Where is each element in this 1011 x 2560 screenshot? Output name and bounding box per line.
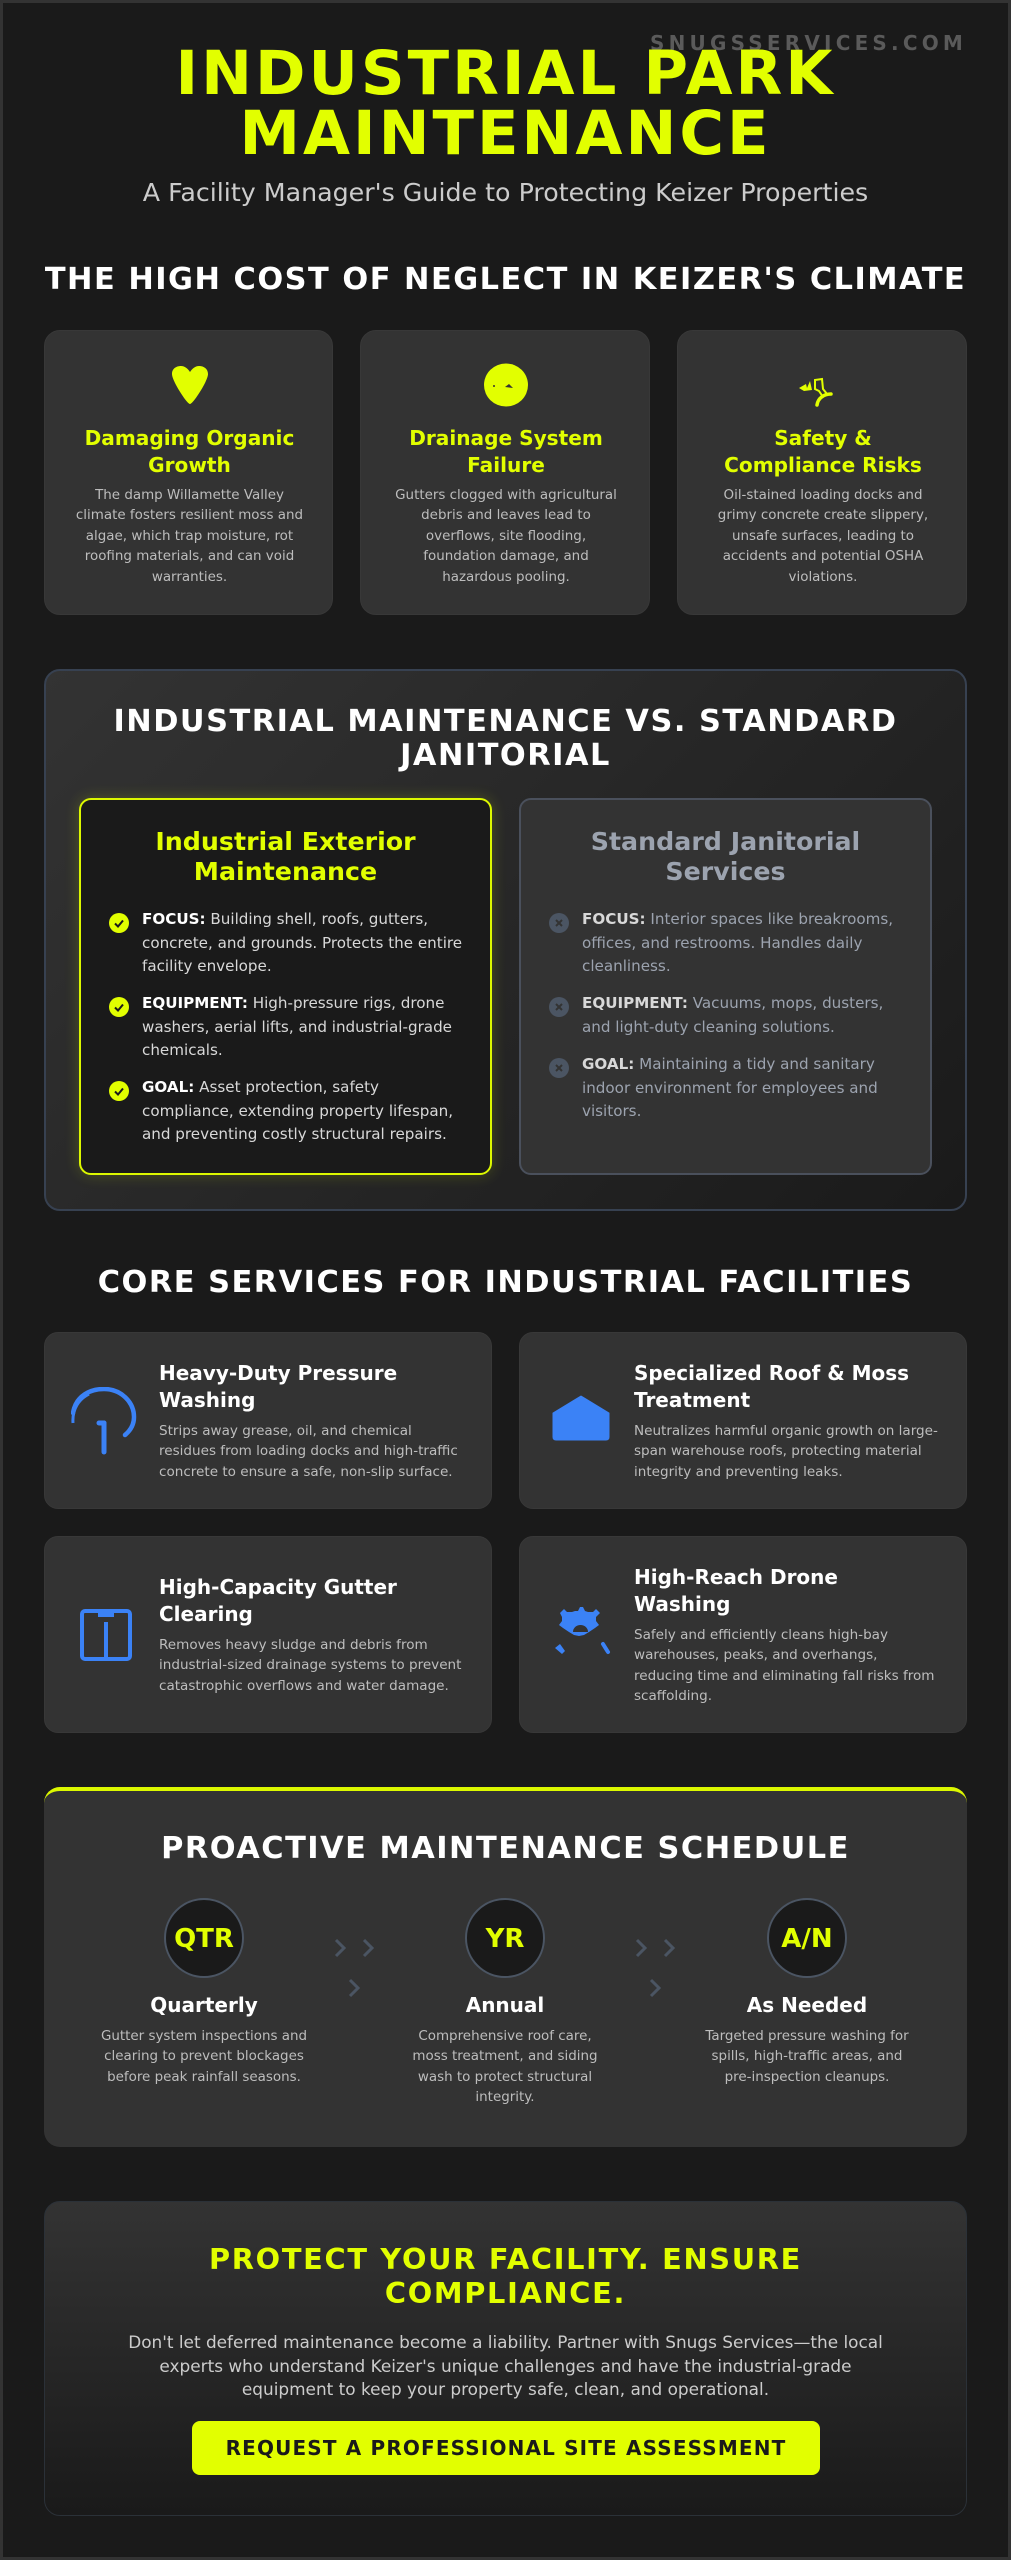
service text: catastrophic overflows and water damage. bbox=[159, 1678, 449, 1694]
icon: pressure arc bbox=[71, 1387, 136, 1454]
service title: Treatment bbox=[634, 1388, 750, 1412]
step text: Gutter system inspections and bbox=[101, 2029, 307, 2044]
panel: call to action bbox=[44, 2201, 967, 2516]
focus item bbox=[582, 910, 893, 975]
service title: High-Reach Drone bbox=[634, 1565, 838, 1589]
goal item: indoor environment for employees and bbox=[582, 1078, 878, 1096]
title: MAINTENANCE bbox=[239, 99, 772, 169]
goal item: visitors. bbox=[582, 1102, 641, 1120]
service text bbox=[159, 1423, 458, 1480]
card text: algae, which trap moisture, rot bbox=[86, 529, 293, 544]
service text: Removes heavy sludge and debris from bbox=[159, 1637, 428, 1653]
panel: damaging organic growth bbox=[44, 330, 333, 615]
card title: Growth bbox=[148, 453, 231, 477]
step text: Comprehensive roof care, bbox=[418, 2029, 592, 2044]
icon: check bbox=[109, 1081, 129, 1101]
equipment item bbox=[142, 994, 452, 1059]
step text: spills, high-traffic areas, and bbox=[712, 2049, 902, 2064]
card title bbox=[724, 426, 922, 477]
service text: warehouses, peaks, and overhangs, bbox=[634, 1647, 877, 1663]
step badge: quarterly: QTR bbox=[174, 1924, 234, 1954]
card text: The damp Willamette Valley bbox=[95, 488, 284, 503]
service title: Specialized Roof & Moss bbox=[634, 1361, 909, 1385]
equipment item bbox=[582, 994, 883, 1036]
step badge: as needed: A/N bbox=[781, 1924, 833, 1954]
focus item: concrete, and grounds. Protects the entire bbox=[142, 934, 462, 952]
step text: before peak rainfall seasons. bbox=[107, 2070, 301, 2085]
service text bbox=[634, 1627, 935, 1704]
service title bbox=[159, 1575, 397, 1626]
service text: scaffolding. bbox=[634, 1688, 712, 1704]
card text bbox=[395, 488, 617, 585]
service title: Heavy-Duty Pressure bbox=[159, 1361, 397, 1385]
icon: heart leaf bbox=[172, 366, 208, 404]
card text: accidents and potential OSHA bbox=[723, 549, 923, 564]
heading: schedule: PROACTIVE MAINTENANCE SCHEDULE bbox=[161, 1831, 850, 1866]
cta heading: COMPLIANCE. bbox=[385, 2276, 626, 2310]
cta text: experts who understand Keizer's unique challenges and have the industrial-grade bbox=[159, 2356, 852, 2376]
icon: check bbox=[109, 913, 129, 933]
icon: gutter bbox=[80, 1609, 132, 1661]
service title: High-Capacity Gutter bbox=[159, 1575, 397, 1599]
service title: Washing bbox=[159, 1388, 255, 1412]
goal item: GOAL: Maintaining a tidy and sanitary bbox=[582, 1055, 875, 1073]
panel: drone washing bbox=[519, 1536, 967, 1733]
step title: Quarterly bbox=[150, 1993, 258, 2017]
step text: Targeted pressure washing for bbox=[705, 2029, 909, 2044]
card title bbox=[85, 426, 294, 477]
service text: industrial-sized drainage systems to prevent bbox=[159, 1657, 461, 1673]
card title: Safety & bbox=[774, 426, 872, 450]
step badge: quarterly bbox=[164, 1898, 244, 1978]
focus item: facility envelope. bbox=[142, 957, 272, 975]
card text: warranties. bbox=[152, 570, 227, 585]
panel: proactive maintenance schedule bbox=[44, 1787, 967, 2147]
card text: foundation damage, and bbox=[423, 549, 589, 564]
step text: clearing to prevent blockages bbox=[104, 2049, 304, 2064]
goal item bbox=[582, 1055, 878, 1120]
service title: Washing bbox=[634, 1592, 730, 1616]
icon: clogged drain bbox=[484, 364, 528, 406]
card title: Failure bbox=[467, 453, 545, 477]
service title bbox=[634, 1361, 909, 1412]
service text: concrete to ensure a safe, non-slip surface. bbox=[159, 1464, 453, 1480]
card text: grimy concrete create slippery, bbox=[718, 508, 928, 523]
subtitle: A Facility Manager's Guide to Protecting Keizer Properties bbox=[143, 178, 868, 207]
card text: Oil-stained loading docks and bbox=[724, 488, 922, 503]
service text: Neutralizes harmful organic growth on large- bbox=[634, 1423, 938, 1439]
panel title: Maintenance bbox=[194, 857, 377, 886]
icon: slip hazard bbox=[799, 378, 833, 407]
panel title bbox=[155, 827, 416, 886]
focus item: offices, and restrooms. Handles daily bbox=[582, 934, 862, 952]
heading: comparison: JANITORIAL bbox=[400, 738, 611, 773]
step title: Annual bbox=[466, 1993, 544, 2017]
service text: integrity and preventing leaks. bbox=[634, 1464, 843, 1480]
goal item: and preventing costly structural repairs. bbox=[142, 1125, 447, 1143]
service text bbox=[634, 1423, 938, 1480]
watermark: website: SNUGSSERVICES.COM bbox=[650, 31, 967, 55]
goal item: compliance, extending property lifespan, bbox=[142, 1102, 453, 1120]
card text bbox=[76, 488, 303, 585]
service text: reducing time and eliminating fall risks from bbox=[634, 1668, 935, 1684]
equipment item: washers, aerial lifts, and industrial-grade bbox=[142, 1018, 452, 1036]
step text: integrity. bbox=[475, 2090, 535, 2105]
icon: roof bbox=[552, 1396, 610, 1440]
icon: drone bbox=[555, 1607, 610, 1654]
card title: Compliance Risks bbox=[724, 453, 922, 477]
icon: check bbox=[109, 997, 129, 1017]
service text: span warehouse roofs, protecting material bbox=[634, 1443, 922, 1459]
panel title: Services bbox=[665, 857, 786, 886]
heading: core services: CORE SERVICES FOR INDUSTRIAL FACILITIES bbox=[98, 1265, 913, 1300]
cta button bbox=[192, 2421, 820, 2475]
cta text bbox=[45, 2331, 966, 2402]
focus item bbox=[142, 910, 462, 975]
step text bbox=[412, 2029, 598, 2105]
panel title: Standard Janitorial bbox=[591, 827, 860, 856]
panel: gutter clearing bbox=[44, 1536, 492, 1733]
goal item bbox=[142, 1078, 453, 1143]
panel title: Industrial Exterior bbox=[155, 827, 416, 856]
card text: hazardous pooling. bbox=[442, 570, 570, 585]
service title bbox=[634, 1565, 838, 1616]
card text: climate fosters resilient moss and bbox=[76, 508, 303, 523]
arrow: quarterly to annual bbox=[335, 1939, 374, 1997]
card title bbox=[409, 426, 603, 477]
focus item: cleanliness. bbox=[582, 957, 671, 975]
card text: overflows, site flooding, bbox=[426, 529, 586, 544]
card text: unsafe surfaces, leading to bbox=[732, 529, 914, 544]
title: INDUSTRIAL PARK bbox=[176, 39, 835, 109]
heading: comparison: INDUSTRIAL MAINTENANCE VS. STANDARD bbox=[113, 704, 898, 739]
card text: roofing materials, and can void bbox=[85, 549, 294, 564]
focus item: FOCUS: Building shell, roofs, gutters, bbox=[142, 910, 428, 928]
card text bbox=[718, 488, 928, 585]
title bbox=[176, 39, 835, 169]
service text bbox=[159, 1637, 462, 1694]
cta text: equipment to keep your property safe, clean, and operational. bbox=[242, 2379, 769, 2399]
step badge: annual: YR bbox=[486, 1924, 524, 1954]
card text: Gutters clogged with agricultural bbox=[395, 488, 617, 503]
step text: wash to protect structural bbox=[418, 2070, 592, 2085]
cta text: Don't let deferred maintenance become a liability. Partner with Snugs Services—the local bbox=[128, 2332, 883, 2352]
card text: debris and leaves lead to bbox=[421, 508, 591, 523]
arrow: annual to as needed bbox=[631, 1935, 681, 2001]
panel: maintenance vs janitorial comparison bbox=[44, 669, 967, 1211]
cta button: REQUEST A PROFESSIONAL SITE ASSESSMENT bbox=[226, 2436, 786, 2460]
card title: Drainage System bbox=[409, 426, 603, 450]
panel: drainage system failure bbox=[360, 330, 650, 615]
service title bbox=[159, 1361, 397, 1412]
step text bbox=[101, 2029, 307, 2085]
service text: residues from loading docks and high-traffic bbox=[159, 1443, 458, 1459]
panel: pressure washing bbox=[44, 1332, 492, 1509]
equipment item: chemicals. bbox=[142, 1041, 223, 1059]
card text: violations. bbox=[789, 570, 857, 585]
panel: standard janitorial services bbox=[519, 798, 932, 1175]
step badge: annual bbox=[465, 1898, 545, 1978]
cta heading: PROTECT YOUR FACILITY. ENSURE bbox=[209, 2242, 802, 2276]
panel: safety and compliance risks bbox=[677, 330, 967, 615]
icon: cross bbox=[549, 997, 569, 1017]
step badge: as needed bbox=[767, 1898, 847, 1978]
heading: high cost of neglect: THE HIGH COST OF NEGLECT IN KEIZER'S CLIMATE bbox=[45, 262, 966, 297]
step title: As Needed bbox=[747, 1993, 867, 2017]
card title: Damaging Organic bbox=[85, 426, 294, 450]
step text: moss treatment, and siding bbox=[412, 2049, 598, 2064]
icon: cross bbox=[549, 1058, 569, 1078]
focus item: FOCUS: Interior spaces like breakrooms, bbox=[582, 910, 893, 928]
service text: Strips away grease, oil, and chemical bbox=[159, 1423, 412, 1439]
goal item: GOAL: Asset protection, safety bbox=[142, 1078, 379, 1096]
service title: Clearing bbox=[159, 1602, 253, 1626]
cta heading bbox=[45, 2242, 966, 2310]
icon: cross bbox=[549, 913, 569, 933]
step text bbox=[647, 2027, 967, 2088]
equipment item: and light-duty cleaning solutions. bbox=[582, 1018, 835, 1036]
service text: Safely and efficiently cleans high-bay bbox=[634, 1627, 888, 1643]
panel: industrial exterior maintenance bbox=[79, 798, 492, 1175]
panel: roof and moss treatment bbox=[519, 1332, 967, 1509]
panel title bbox=[591, 827, 860, 886]
equipment item: EQUIPMENT: Vacuums, mops, dusters, bbox=[582, 994, 883, 1012]
step text: pre-inspection cleanups. bbox=[725, 2070, 889, 2085]
heading: comparison bbox=[113, 704, 898, 773]
equipment item: EQUIPMENT: High-pressure rigs, drone bbox=[142, 994, 444, 1012]
